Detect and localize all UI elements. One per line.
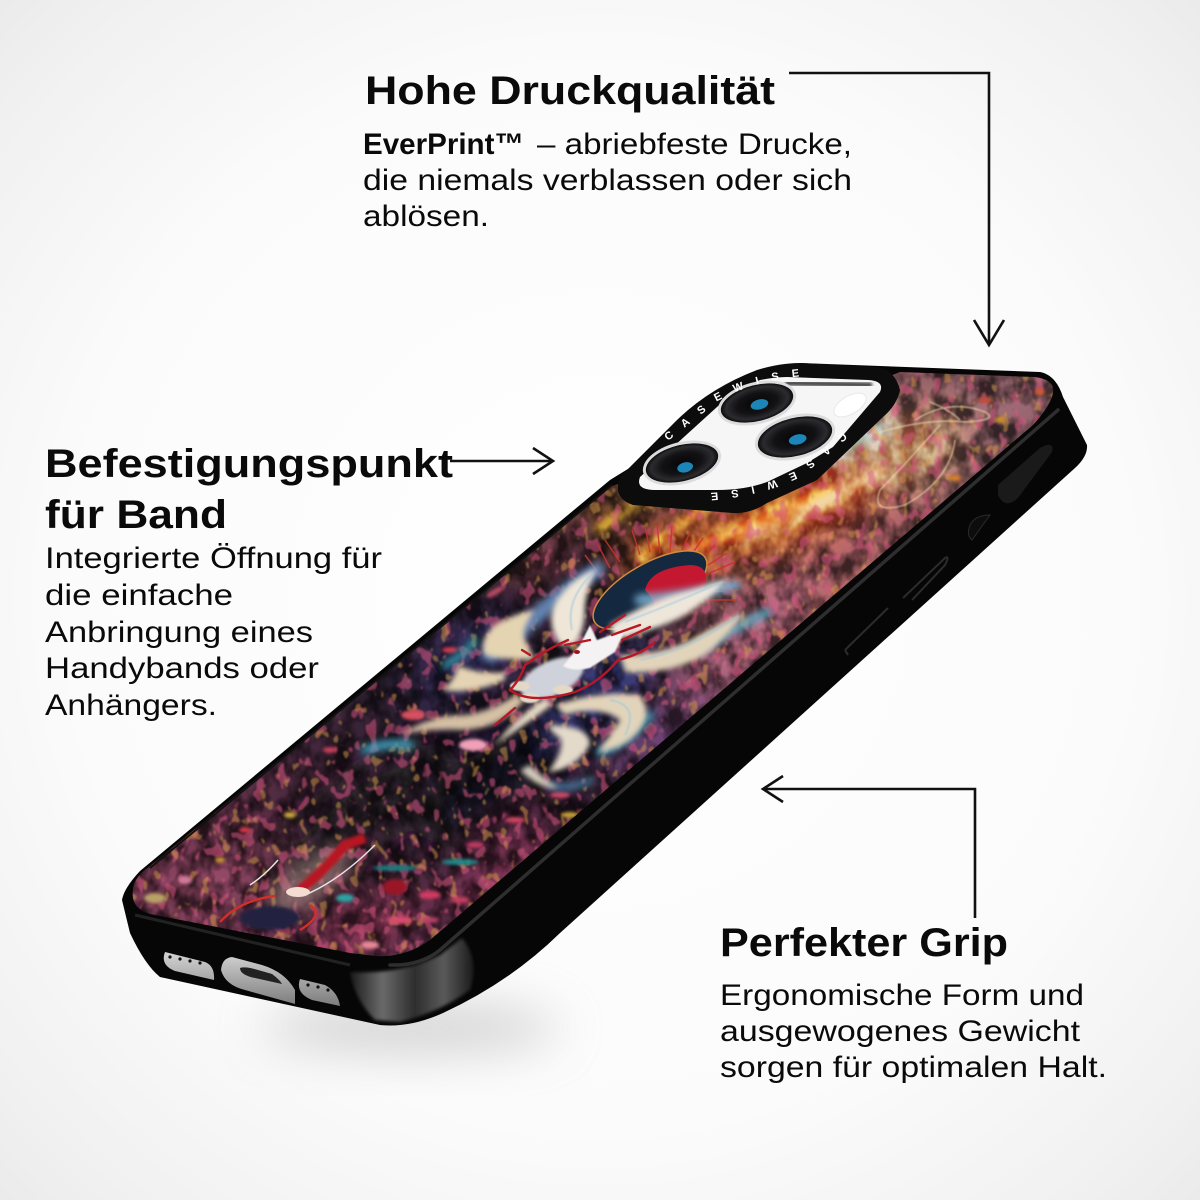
body: grip: sorgen für optimalen Halt.	[720, 1051, 1107, 1084]
scattered pink speckle	[120, 360, 1070, 970]
fox body	[518, 654, 586, 701]
brand text lower: CASEWISE	[711, 434, 846, 500]
body: grip	[720, 979, 1107, 1084]
right speaker	[299, 979, 340, 1006]
corner sheen	[350, 938, 474, 1022]
heading: print quality: Hohe Druckqualität	[365, 69, 775, 113]
plate top shadow	[785, 383, 872, 385]
side button small	[968, 515, 990, 540]
camera plate	[639, 377, 881, 490]
left speaker	[164, 952, 214, 980]
case body	[122, 363, 1087, 1026]
body: print quality	[363, 128, 852, 233]
fox red markings	[495, 615, 655, 725]
grain texture	[120, 360, 1070, 970]
body: strap attachment: Integrierte Öffnung für	[45, 542, 382, 575]
charging port	[221, 957, 295, 1004]
lens right	[750, 406, 840, 468]
tails	[400, 568, 745, 788]
pink and orange flecks	[144, 389, 1045, 949]
moon dark half	[592, 550, 708, 630]
lens top	[713, 373, 801, 433]
moon disc with rays	[570, 524, 740, 630]
rim lines on top edge	[150, 485, 612, 868]
body: strap attachment: die einfache	[45, 579, 233, 612]
scattered gold speckle	[120, 360, 1070, 970]
arrow: strap callout	[450, 448, 553, 474]
body: grip: ausgewogenes Gewicht	[720, 1015, 1081, 1048]
body: strap attachment: Handybands oder	[45, 652, 319, 685]
text block: strap attachment	[45, 442, 453, 722]
bottom bevel highlight	[135, 915, 350, 965]
lens left	[638, 433, 726, 493]
body: grip: Ergonomische Form und	[720, 979, 1084, 1012]
side switch	[998, 445, 1052, 503]
fire tongues	[600, 430, 880, 560]
volume up	[903, 557, 948, 600]
side wall highlight	[390, 410, 1058, 965]
body: strap attachment: Anbringung eines	[45, 616, 313, 649]
body: print quality: ablösen.	[363, 200, 489, 233]
flash	[830, 388, 870, 422]
fox paws	[510, 681, 573, 703]
camera island	[578, 363, 900, 515]
camera ring	[618, 363, 900, 513]
arrow: top callout	[789, 73, 1004, 345]
fox eye	[574, 650, 580, 654]
tails blue underglow	[365, 570, 768, 787]
moon red half	[645, 565, 706, 606]
body: print quality: EverPrint™	[363, 128, 524, 161]
tail strands	[571, 574, 738, 735]
text block: print quality	[363, 69, 852, 233]
body: print quality: die niemals verblassen oder sich	[363, 164, 852, 197]
body: strap attachment: Anhängers.	[45, 689, 217, 722]
small figure near bottom	[220, 833, 375, 930]
heading: strap attachment: Befestigungspunkt	[45, 442, 453, 486]
heading: grip: Perfekter Grip	[720, 921, 1008, 965]
text block: grip	[720, 921, 1107, 1084]
phone shadow	[260, 1002, 560, 1054]
arrow: grip callout	[763, 776, 975, 918]
fox with tails	[365, 568, 768, 788]
red rays	[570, 524, 740, 600]
heading: strap attachment: für Band	[45, 493, 227, 537]
colour clouds	[141, 341, 1068, 964]
aurora wisps	[878, 402, 990, 508]
heading: strap attachment	[45, 442, 453, 537]
volume down	[845, 608, 888, 655]
body: strap attachment	[45, 542, 382, 722]
phone case	[122, 363, 1088, 1026]
brand text upper: CASEWISE	[664, 369, 799, 440]
printed back art	[120, 341, 1070, 970]
fox head	[563, 625, 625, 670]
body: print quality: – abriebfeste Drucke,	[537, 128, 852, 161]
